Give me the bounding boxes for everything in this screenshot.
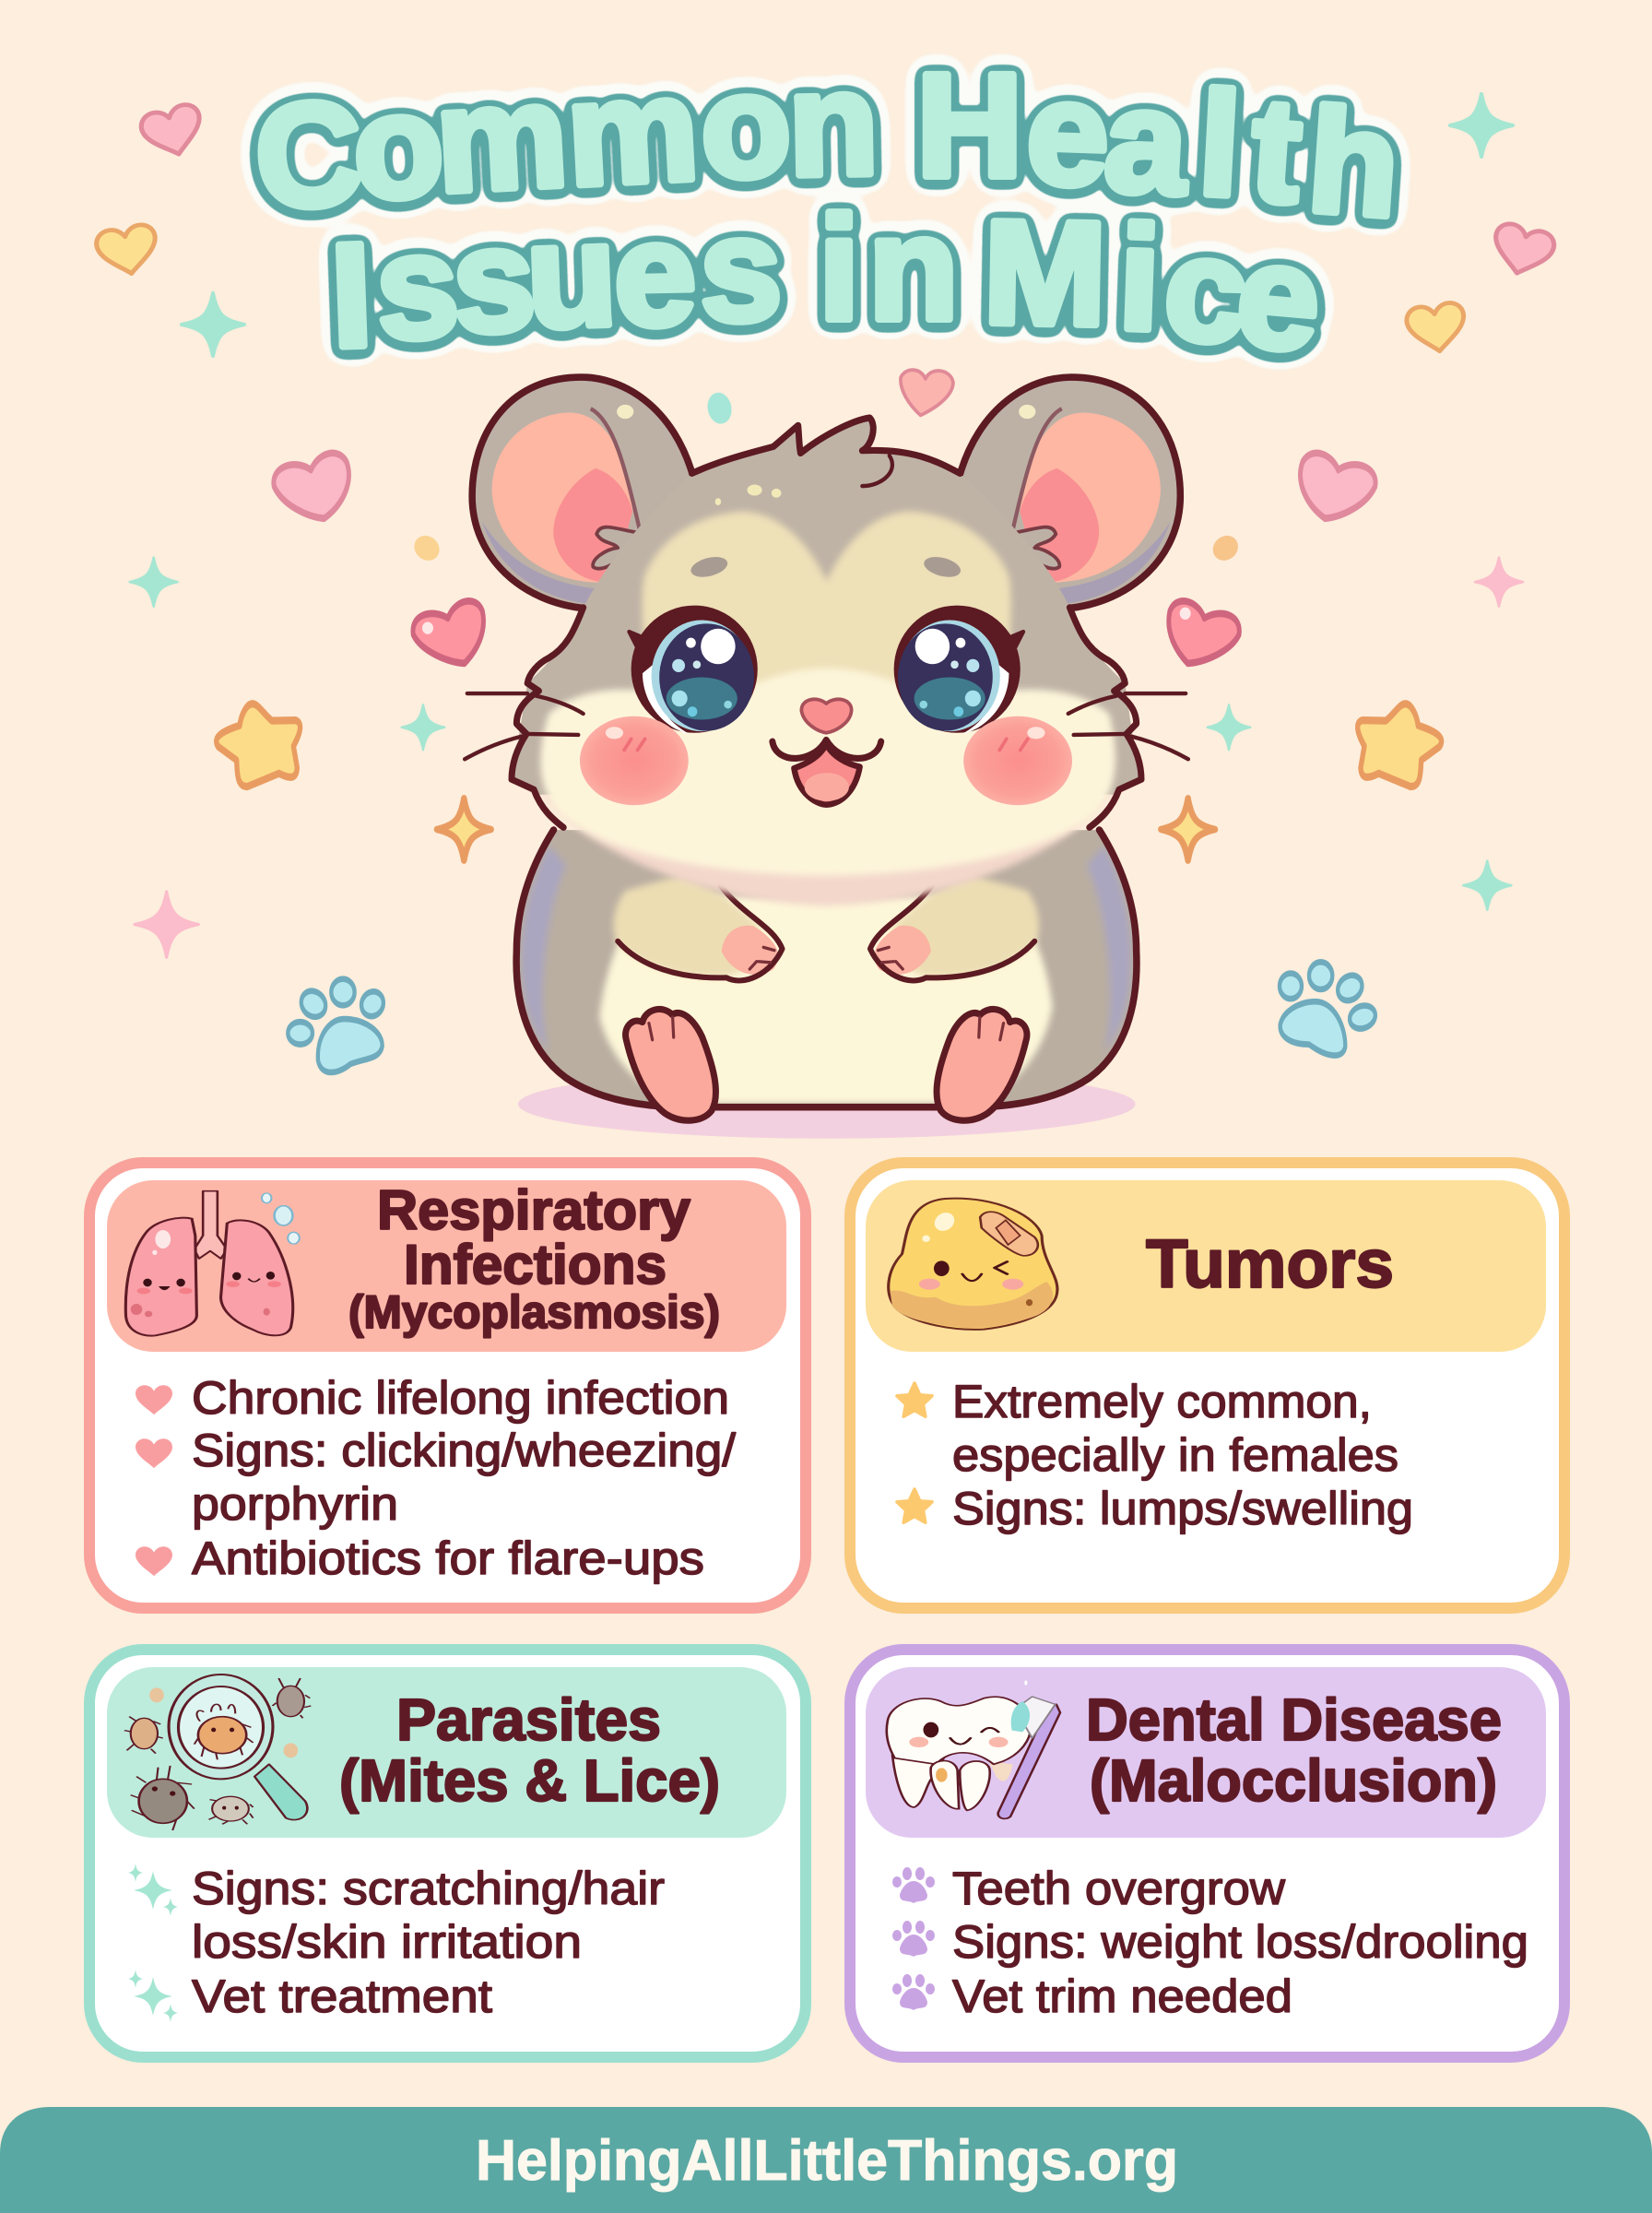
bullet list: dental: Teeth overgrow xyxy=(952,1863,1286,1914)
icon: mint sparkle top left xyxy=(182,293,244,356)
header band xyxy=(107,1180,786,1352)
head xyxy=(512,418,1139,795)
bullet list: tumors: Signs: lumps/swelling xyxy=(952,1483,1413,1534)
bullet list: dental xyxy=(892,1863,1528,2022)
belly xyxy=(599,895,1053,1104)
heading: respiratory infections: Respiratory xyxy=(377,1179,691,1241)
header band xyxy=(866,1180,1546,1352)
icon: orange dot xyxy=(1212,533,1239,562)
icon: pink heart top right xyxy=(1488,221,1557,280)
bullet list: dental: Signs: weight loss/drooling xyxy=(952,1916,1528,1968)
right ear xyxy=(958,377,1180,609)
right blush xyxy=(963,716,1072,805)
mouse illustration xyxy=(465,370,1188,1139)
bullet list: parasites xyxy=(128,1863,665,2022)
whiskers xyxy=(465,693,1188,759)
icon: lungs xyxy=(125,1191,300,1336)
left arm xyxy=(613,875,783,980)
heading: dental disease: Dental Disease xyxy=(1086,1686,1502,1753)
head lower shading xyxy=(537,785,1116,905)
card frame xyxy=(850,1163,1564,1608)
icon: tumor blob xyxy=(889,1199,1057,1330)
bullet list: tumors: Extremely common, xyxy=(952,1376,1372,1427)
header band xyxy=(107,1667,786,1838)
left ear xyxy=(472,377,694,609)
bullet list: parasites: loss/skin irritation xyxy=(192,1916,582,1968)
icon: yellow dot xyxy=(413,533,441,562)
bullet list: respiratory: Chronic lifelong infection xyxy=(192,1372,729,1424)
footer text: HelpingAllLittleThings.org xyxy=(476,2129,1178,2193)
left eye xyxy=(629,606,758,734)
heading: parasites: Parasites xyxy=(396,1686,661,1753)
icon: pink heart top left xyxy=(138,101,207,161)
bullet list: respiratory: porphyrin xyxy=(192,1478,398,1530)
panel: tumors xyxy=(850,1163,1564,1608)
bullet list: respiratory xyxy=(136,1372,736,1584)
card frame xyxy=(89,1163,806,1608)
heading: respiratory infections: (Mycoplasmosis) xyxy=(348,1286,720,1338)
card frame xyxy=(850,1650,1564,2057)
eyebrows xyxy=(689,553,729,581)
panel: dental disease xyxy=(850,1650,1564,2057)
icon: red heart xyxy=(413,601,483,663)
bullet list: tumors xyxy=(897,1376,1413,1534)
icon: small mint sparkle xyxy=(402,704,444,750)
small heart above mouse xyxy=(901,370,953,415)
bullet list: parasites: Vet treatment xyxy=(192,1970,492,2022)
icon: orange sparkle right xyxy=(1161,799,1215,860)
right foot xyxy=(937,1009,1027,1120)
title: Issues in Mice xyxy=(328,185,1327,383)
panel: respiratory infections xyxy=(89,1163,806,1608)
icon: orange sparkle xyxy=(437,799,491,860)
mouth xyxy=(773,740,881,805)
icon: yellow heart top right xyxy=(1405,302,1468,355)
icon: yellow star right xyxy=(1358,704,1442,787)
head outline xyxy=(512,418,1141,827)
cream lower face xyxy=(540,669,1115,875)
forehead tuft line xyxy=(862,456,892,486)
card frame xyxy=(89,1650,806,2057)
body outline xyxy=(516,830,1137,1107)
footer banner xyxy=(0,2107,1652,2213)
body xyxy=(516,830,1137,1107)
heading: parasites xyxy=(339,1686,720,1814)
heading: dental disease xyxy=(1086,1686,1502,1814)
body shadow edges xyxy=(522,846,1131,1052)
ground shadow xyxy=(518,1070,1136,1139)
bullet list: tumors: especially in females xyxy=(952,1429,1398,1481)
decorations right of mouse xyxy=(1161,453,1523,1056)
panel: parasites xyxy=(89,1650,806,2057)
right eye xyxy=(894,606,1023,734)
teal droplet xyxy=(704,390,735,426)
icon: blue paw right xyxy=(1280,962,1376,1056)
icon: pink sparkle xyxy=(135,892,198,957)
icon: mint sparkle right xyxy=(1463,861,1511,910)
decorative hearts and sparkles at top xyxy=(94,94,1557,356)
icon: blue paw left xyxy=(288,979,384,1072)
header band xyxy=(866,1667,1546,1838)
icon: mint sparkle top right xyxy=(1450,94,1513,157)
icon: yellow heart top left xyxy=(94,222,160,278)
heading: parasites: (Mites & Lice) xyxy=(339,1747,720,1814)
heading: respiratory infections xyxy=(348,1179,720,1338)
right arm xyxy=(870,875,1039,980)
decorations left of mouse xyxy=(130,453,491,1072)
forehead speckles xyxy=(715,484,781,505)
icon: large pink heart right xyxy=(1301,453,1375,518)
icon: red heart right xyxy=(1169,601,1239,663)
icon: yellow star xyxy=(217,704,301,787)
heading: dental disease: (Malocclusion) xyxy=(1090,1747,1497,1814)
icon: tooth and toothbrush xyxy=(887,1680,1060,1818)
title xyxy=(251,40,1405,383)
icon: pink sparkle right xyxy=(1475,558,1523,607)
bullet list: dental: Vet trim needed xyxy=(952,1970,1292,2022)
bullet list: parasites: Signs: scratching/hair xyxy=(192,1863,665,1914)
heading: respiratory infections: Infections xyxy=(404,1234,667,1296)
tan face mask xyxy=(643,512,1011,693)
left blush xyxy=(580,716,689,805)
left foot xyxy=(626,1009,715,1120)
bullet list: respiratory: Antibiotics for flare-ups xyxy=(192,1533,704,1584)
icon: large pink heart xyxy=(274,453,348,518)
icon: small mint sparkle right xyxy=(1208,704,1250,750)
icon: mint sparkle xyxy=(130,558,178,607)
nose xyxy=(801,699,852,733)
bullet list: respiratory: Signs: clicking/wheezing/ xyxy=(192,1425,736,1476)
heading: tumors: Tumors xyxy=(1146,1225,1394,1302)
icon: magnifier and mites xyxy=(124,1675,311,1830)
title: Common Health xyxy=(251,40,1405,248)
